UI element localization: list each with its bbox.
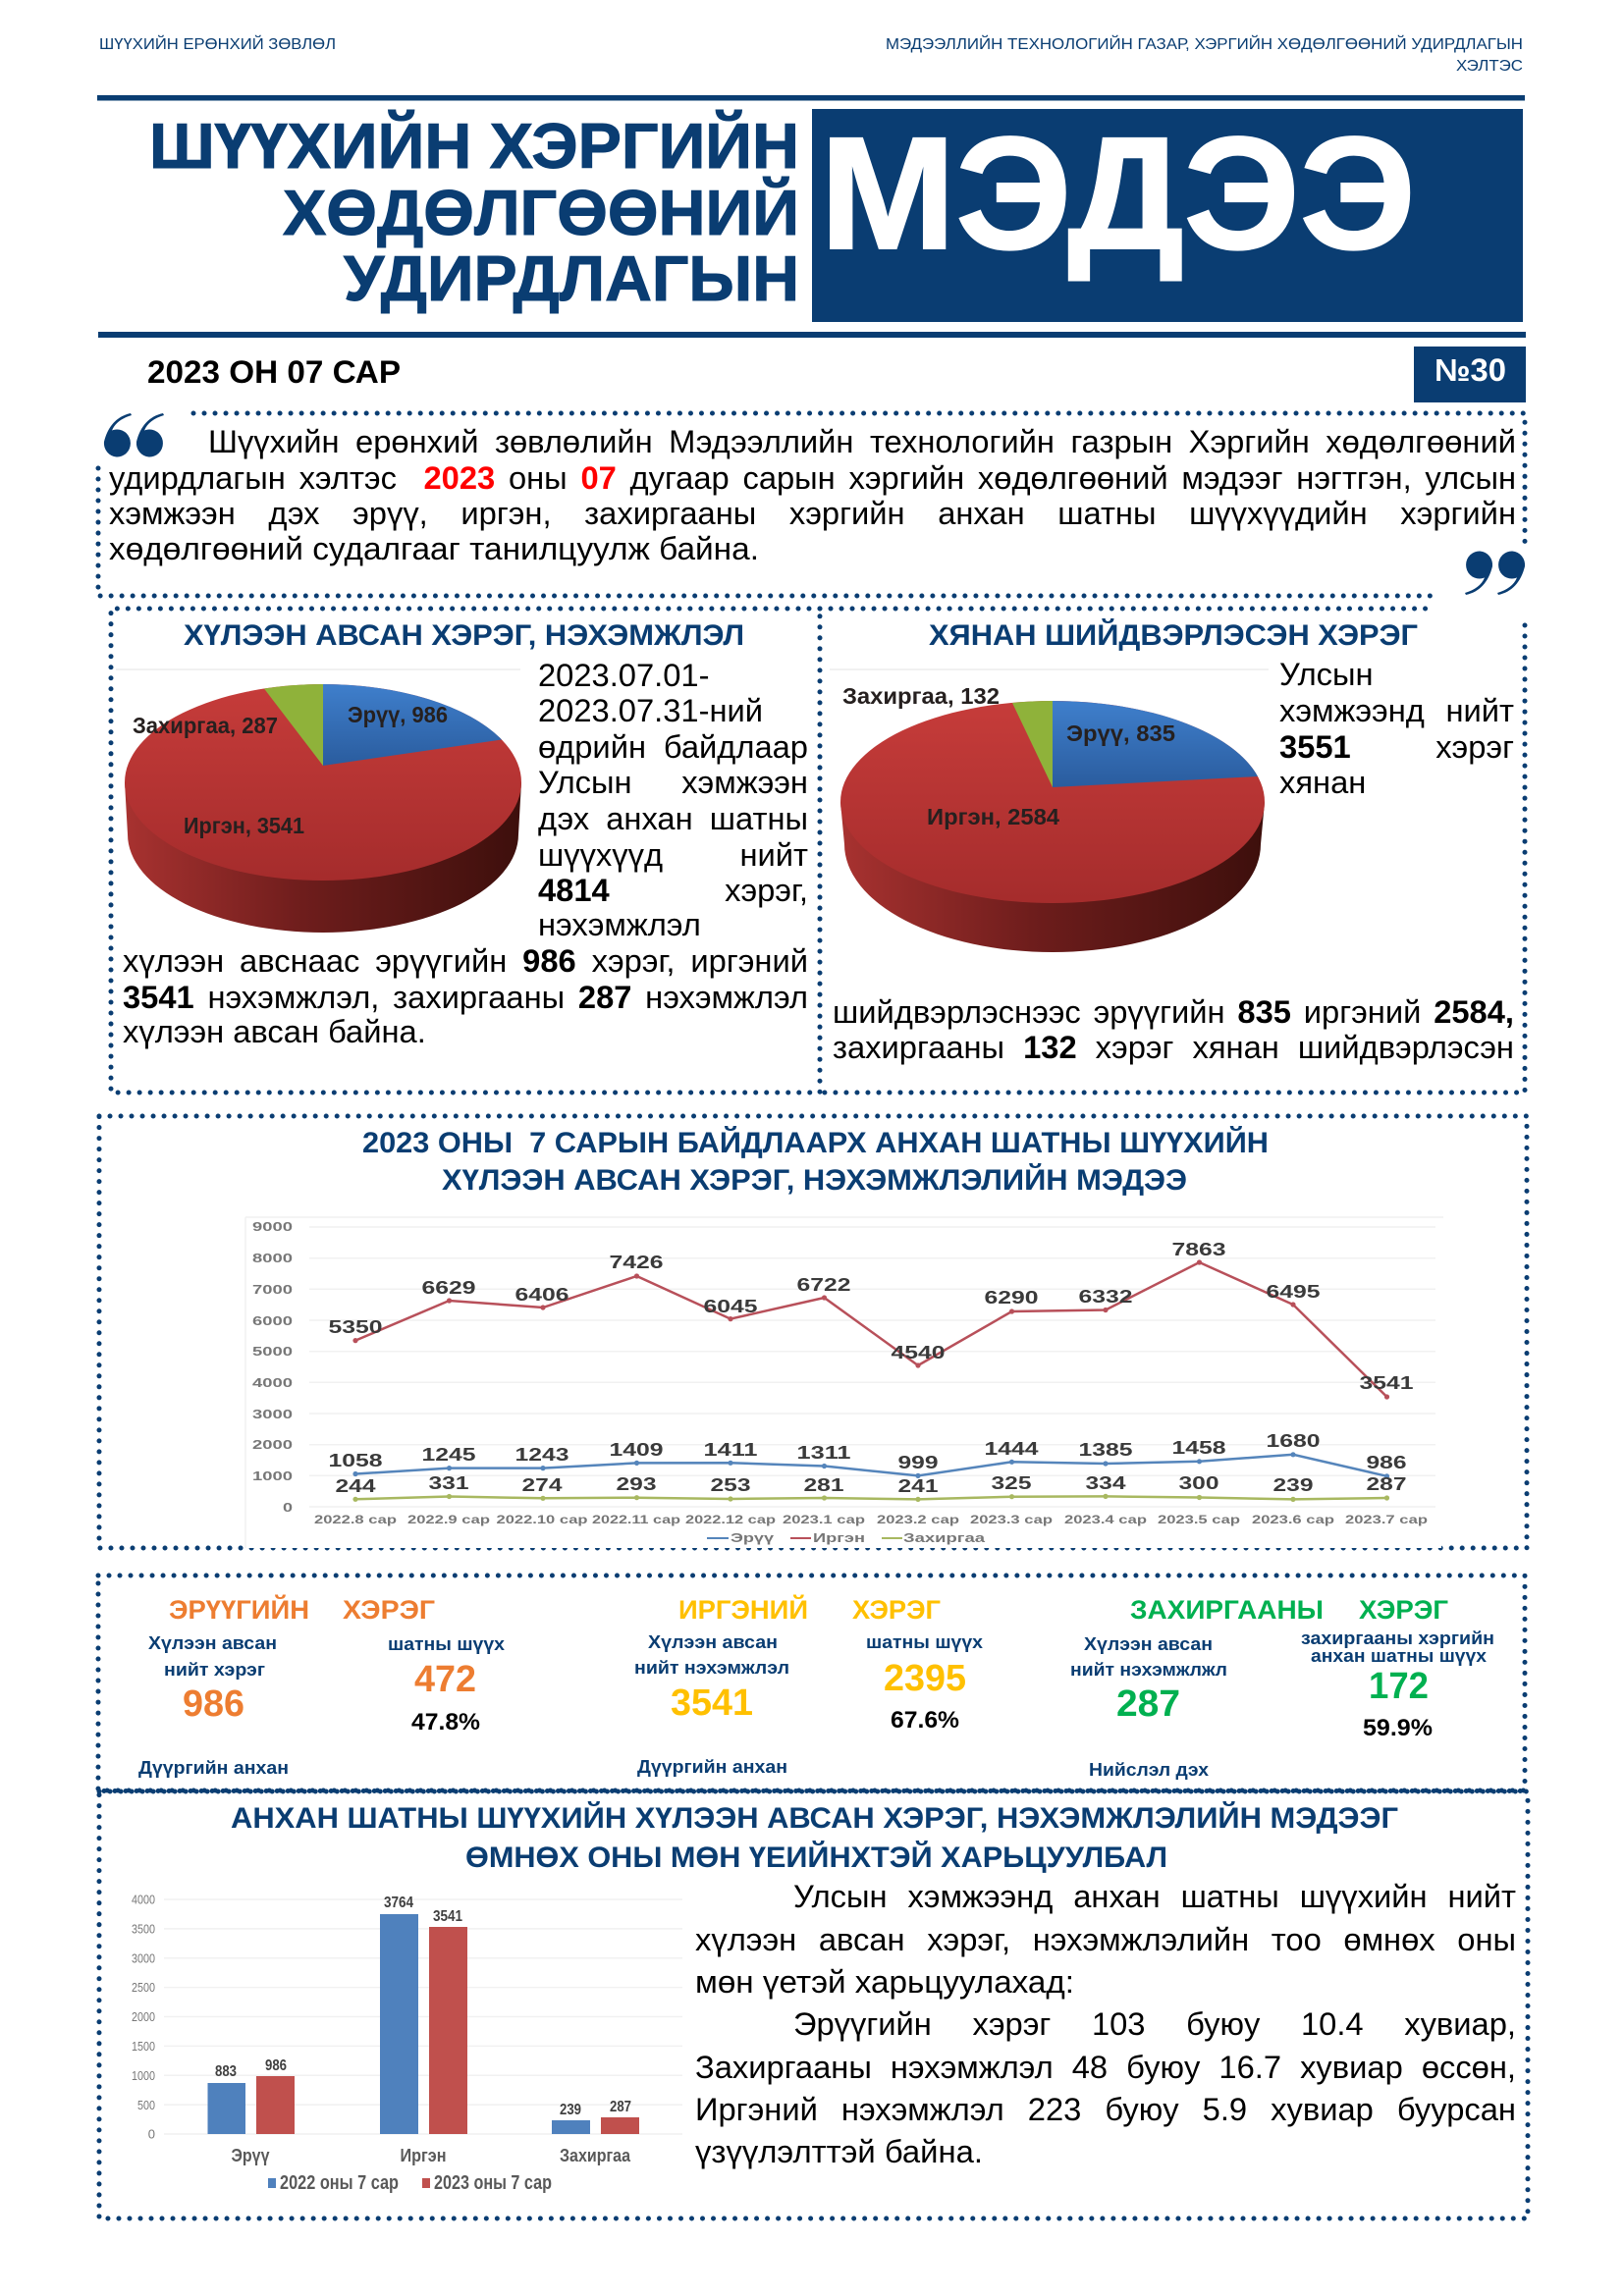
title box: МЭДЭЭ: МЭДЭЭ	[820, 103, 1416, 283]
series: Эрүү: 1458	[1172, 1438, 1225, 1458]
x axis labels: 2022.8 сар	[314, 1513, 397, 1526]
title box: МЭДЭЭ	[812, 103, 1523, 322]
series: Иргэн	[328, 1240, 1414, 1397]
panel: monthly trend	[99, 1116, 1527, 1548]
y axis labels: 7000	[252, 1282, 293, 1297]
x axis labels: 2022.12 сар	[685, 1513, 776, 1526]
bar values: 986	[265, 2057, 287, 2074]
series: Эрүү: 1245	[422, 1445, 475, 1465]
legend	[707, 1530, 986, 1545]
series: Захиргаа: 244	[336, 1476, 375, 1496]
stat group: civil	[634, 1594, 983, 1777]
series: Захиргаа: 239	[1272, 1475, 1314, 1495]
y axis labels: 8000	[252, 1251, 293, 1265]
pie chart: decided: Захиргаа, 132	[842, 683, 1000, 709]
text block: comparison: Эрүүгийн хэрэг 103 буюу 10.4 хувиар,	[793, 2006, 1516, 2042]
bar chart axis labels: 2500	[132, 1980, 155, 1995]
issue number badge	[1414, 347, 1526, 402]
series: Эрүү: 1311	[797, 1443, 850, 1463]
panel: decided cases	[820, 609, 1525, 1093]
stat group: criminal: Дүүргийн анхан	[138, 1758, 289, 1778]
y axis labels: 9000	[252, 1219, 293, 1234]
panel: introduction	[98, 413, 1525, 596]
categories	[232, 2146, 631, 2165]
y axis labels: 5000	[252, 1344, 293, 1359]
text block: received: өдрийн байдлаар	[538, 729, 808, 765]
x axis labels: 2022.11 сар	[592, 1513, 680, 1526]
stat group: criminal: Хүлээн авсан	[148, 1633, 277, 1653]
series: Эрүү: 986	[1367, 1453, 1406, 1472]
series: Эрүү: 999	[897, 1453, 939, 1472]
series: Иргэн: 7426	[609, 1253, 664, 1272]
panel: key statistics	[98, 1575, 1525, 1790]
bar chart axis labels: 1500	[132, 2039, 155, 2054]
stat group: administrative: захиргааны хэргийн	[1301, 1629, 1494, 1648]
text block: comparison: үзүүлэлттэй байна.	[695, 2133, 983, 2169]
department name line 2: ХЭЛТЭС	[1456, 58, 1523, 75]
bar values: 287	[610, 2099, 631, 2115]
stat group: criminal: 47.8%	[411, 1709, 480, 1735]
series: Захиргаа: 253	[711, 1475, 750, 1495]
pie chart: received: Эрүү, 986	[348, 702, 448, 727]
series: Эрүү: 1243	[514, 1445, 569, 1465]
y axis labels: 6000	[252, 1313, 293, 1328]
y axis labels: 0	[283, 1500, 293, 1515]
series: Захиргаа: 274	[522, 1475, 562, 1495]
series: Эрүү: 1409	[609, 1440, 664, 1460]
text block: received: шүүхүүд нийт	[538, 837, 808, 873]
series: Иргэн: 7863	[1172, 1240, 1225, 1259]
series: Захиргаа: 293	[617, 1474, 656, 1494]
bar values: 883	[215, 2063, 237, 2080]
text block: comparison: хүлээн авсан хэрэг, нэхэмжлэлийн тоо өмнөх оны	[695, 1922, 1516, 1957]
stat group: administrative: ХЭРЭГ	[1359, 1595, 1448, 1625]
y axis labels: 4000	[252, 1375, 293, 1390]
series: Захиргаа	[336, 1473, 1406, 1499]
y axis labels: 2000	[252, 1437, 293, 1452]
x axis labels: 2023.1 сар	[783, 1513, 865, 1526]
series: Иргэн: 6045	[703, 1297, 758, 1316]
line chart	[245, 1215, 1443, 1548]
y axis labels: 1000	[252, 1468, 293, 1483]
x axis labels: 2023.6 сар	[1252, 1513, 1334, 1526]
title: three lines: УДИРДЛАГЫН	[344, 242, 799, 314]
text block: comparison: Иргэний нэхэмжлэл 223 буюу 5.9 хувиар буурсан	[695, 2092, 1516, 2127]
categories: Эрүү	[232, 2146, 269, 2165]
pie chart: received: Захиргаа, 287	[133, 713, 278, 738]
chart title: 2023 ОНЫ 7 САРЫН БАЙДЛААРХ АНХАН ШАТНЫ ШҮҮХИЙН	[362, 1126, 1269, 1159]
stat group: criminal: нийт хэрэг	[164, 1660, 266, 1680]
bar values	[215, 1895, 631, 2118]
heading: ХҮЛЭЭН АВСАН ХЭРЭГ, НЭХЭМЖЛЭЛ	[184, 619, 744, 652]
heading: ХЯНАН ШИЙДВЭРЛЭСЭН ХЭРЭГ	[929, 618, 1418, 652]
stat group: criminal: ЭРҮҮГИЙН	[169, 1594, 309, 1625]
stat group: civil: 3541	[671, 1682, 753, 1724]
text block: received: 2023.07.01-	[538, 657, 709, 693]
x axis labels: 2023.7 сар	[1345, 1513, 1428, 1526]
text block: decided: хэмжээнд нийт	[1279, 693, 1514, 728]
bar chart axis labels: 1000	[132, 2068, 155, 2083]
series: Иргэн: 4540	[892, 1343, 945, 1362]
bar chart legend	[268, 2172, 552, 2194]
heading: АНХАН ШАТНЫ ШҮҮХИЙН ХҮЛЭЭН АВСАН ХЭРЭГ, НЭХЭМЖЛЭЛИЙН МЭДЭЭГ	[231, 1801, 1398, 1835]
title: three lines	[149, 110, 799, 314]
issue number badge: №30	[1435, 352, 1506, 388]
series: Захиргаа: 287	[1367, 1474, 1406, 1494]
bar values: 239	[560, 2102, 581, 2118]
stat group: criminal	[138, 1594, 505, 1778]
text block: decided: 3551 хэрэг	[1279, 729, 1514, 765]
categories: Иргэн	[401, 2146, 446, 2165]
title: three lines: ШҮҮХИЙН ХЭРГИЙН	[149, 110, 799, 182]
stat group: civil: Хүлээн авсан	[648, 1632, 778, 1652]
series: Эрүү: 1680	[1267, 1431, 1320, 1451]
bar chart legend: 2023 оны 7 сар	[434, 2172, 552, 2194]
pie chart: received	[116, 669, 521, 933]
intro text: Шүүхийн ерөнхий зөвлөлийн Мэдээллийн технологийн газрын Хэргийн хөдөлгөөний	[208, 424, 1516, 459]
chart title	[362, 1126, 1269, 1197]
panel: received cases	[111, 609, 820, 1093]
bar chart	[132, 1893, 682, 2194]
bar chart axis labels	[132, 1893, 155, 2142]
bar chart axis labels: 4000	[132, 1893, 155, 1906]
x axis labels: 2022.10 сар	[497, 1513, 587, 1526]
stat group: civil: ХЭРЭГ	[852, 1595, 941, 1625]
stat group: civil: 2395	[884, 1658, 966, 1699]
masthead	[97, 95, 1526, 338]
x axis labels: 2023.4 сар	[1064, 1513, 1147, 1526]
header: top small text	[99, 34, 1523, 75]
icon: opening quote	[104, 413, 164, 456]
stat group: civil: нийт нэхэмжлэл	[634, 1658, 789, 1678]
series: Эрүү: 1385	[1078, 1440, 1133, 1460]
text block: received: 4814 хэрэг,	[538, 873, 808, 908]
categories: Захиргаа	[560, 2146, 631, 2165]
stat group: civil: шатны шүүх	[866, 1632, 983, 1652]
legend: Захиргаа	[903, 1530, 986, 1545]
series: Иргэн: 6332	[1078, 1287, 1133, 1307]
pie chart: decided	[830, 669, 1269, 952]
bar values: 3764	[384, 1895, 413, 1911]
x axis labels: 2023.2 сар	[877, 1513, 959, 1526]
series: Иргэн: 6290	[984, 1288, 1039, 1308]
icon: closing quote	[1465, 552, 1525, 595]
bars	[208, 1914, 639, 2134]
text block: comparison	[695, 1879, 1516, 2169]
title: three lines: ХӨДӨЛГӨӨНИЙ	[283, 177, 799, 248]
text block: comparison: Улсын хэмжээнд анхан шатны шүүхийн нийт	[793, 1879, 1516, 1914]
organisation name: ШҮҮХИЙН ЕРӨНХИЙ ЗӨВЛӨЛ	[99, 34, 336, 53]
stat group: administrative: ЗАХИРГААНЫ	[1130, 1595, 1324, 1625]
text block: comparison: мөн үетэй харьцуулахад:	[695, 1963, 1074, 2000]
stat group: administrative: Хүлээн авсан	[1084, 1634, 1213, 1654]
legend: Иргэн	[813, 1530, 865, 1545]
series: Захиргаа: 241	[897, 1476, 939, 1496]
text block: received: хүлээн авснаас эрүүгийн 986 хэрэг, иргэний	[123, 943, 808, 979]
intro text: удирдлагын хэлтэс 2023 оны 07 дугаар сарын хэргийн хөдөлгөөний мэдээг нэгтгэн, улсын	[109, 460, 1516, 496]
y axis labels: 3000	[252, 1407, 293, 1421]
series: Захиргаа: 331	[428, 1473, 469, 1493]
text block: received: хүлээн авсан байна.	[123, 1013, 426, 1049]
intro text: хөдөлгөөний судалгааг танилцуулж байна.	[109, 530, 759, 566]
bar chart axis labels: 0	[148, 2126, 155, 2142]
intro text: хэмжээн дэх эрүү, иргэн, захиргааны хэргийн анхан шатны шүүхүүдийн хэргийн	[109, 496, 1516, 531]
legend: Эрүү	[731, 1530, 775, 1545]
x axis labels: 2023.3 сар	[970, 1513, 1053, 1526]
series: Эрүү: 1444	[984, 1439, 1039, 1459]
series: Иргэн: 6722	[797, 1275, 850, 1295]
x axis labels: 2023.5 сар	[1158, 1513, 1240, 1526]
stat group: administrative: Нийслэл дэх	[1089, 1760, 1209, 1780]
text block: received: нэхэмжлэл	[538, 906, 701, 942]
text block: received: 3541 нэхэмжлэл, захиргааны 287 нэхэмжлэл	[123, 980, 808, 1015]
bar chart axis labels: 3000	[132, 1950, 155, 1965]
text block: decided	[833, 656, 1514, 1066]
stat group: criminal: 986	[183, 1683, 244, 1725]
bar chart axis labels: 2000	[132, 2009, 155, 2024]
text block: decided: шийдвэрлэснээс эрүүгийн 835 иргэний 2584,	[833, 994, 1514, 1030]
panel: year-over-year comparison	[99, 1791, 1528, 2218]
text block: decided: Улсын	[1279, 656, 1374, 692]
series: Захиргаа: 334	[1086, 1473, 1125, 1493]
stat group: criminal: ХЭРЭГ	[343, 1595, 435, 1625]
pie chart: decided: Эрүү, 835	[1066, 721, 1175, 746]
series: Иргэн: 6406	[514, 1285, 569, 1305]
stat group: administrative: 59.9%	[1363, 1715, 1433, 1741]
series: Захиргаа: 300	[1178, 1473, 1219, 1493]
series: Эрүү: 1058	[328, 1451, 383, 1470]
intro text	[109, 424, 1516, 566]
heading	[231, 1801, 1398, 1874]
bar values: 3541	[433, 1908, 462, 1925]
stat group: administrative: нийт нэхэмжлжл	[1070, 1660, 1227, 1680]
pie chart: decided: Иргэн, 2584	[927, 804, 1059, 829]
x axis labels	[314, 1513, 1428, 1526]
stat group: administrative: анхан шатны шүүх	[1311, 1646, 1487, 1666]
text block: decided: хянан	[1279, 764, 1366, 800]
stat group: administrative	[1070, 1595, 1494, 1780]
text block: received: 2023.07.31-ний	[538, 692, 763, 728]
heading: ӨМНӨХ ОНЫ МӨН ҮЕИЙНХТЭЙ ХАРЬЦУУЛБАЛ	[465, 1841, 1167, 1874]
pie chart: received: Иргэн, 3541	[184, 813, 304, 838]
stat group: administrative: 287	[1116, 1683, 1180, 1725]
series: Эрүү: 1411	[703, 1440, 758, 1460]
stat group: civil: Дүүргийн анхан	[637, 1757, 787, 1777]
stat group: administrative: 172	[1369, 1666, 1429, 1707]
text block: received: дэх анхан шатны	[538, 801, 808, 836]
stat group: criminal: 472	[414, 1659, 476, 1700]
text block: decided: захиргааны 132 хэрэг хянан шийдвэрлэсэн	[833, 1030, 1514, 1065]
date: 2023 ОН 07 САР	[147, 354, 401, 390]
series: Иргэн: 6629	[422, 1278, 475, 1298]
x axis labels: 2022.9 сар	[407, 1513, 490, 1526]
bar chart axis labels: 500	[137, 2098, 155, 2112]
stat group: civil: ИРГЭНИЙ	[678, 1594, 808, 1625]
series: Иргэн: 3541	[1359, 1373, 1414, 1393]
department name: МЭДЭЭЛЛИЙН ТЕХНОЛОГИЙН ГАЗАР, ХЭРГИЙН ХӨДӨЛГӨӨНИЙ УДИРДЛАГЫН	[886, 34, 1523, 53]
bar chart legend: 2022 оны 7 сар	[280, 2172, 399, 2194]
bar chart axis labels: 3500	[132, 1921, 155, 1936]
stat group: civil: 67.6%	[891, 1707, 959, 1734]
text block: comparison: Захиргааны нэхэмжлэл 48 буюу 16.7 хувиар өссөн,	[695, 2050, 1516, 2085]
chart title: ХҮЛЭЭН АВСАН ХЭРЭГ, НЭХЭМЖЛЭЛИЙН МЭДЭЭ	[442, 1163, 1187, 1197]
series: Захиргаа: 281	[803, 1475, 844, 1495]
text block: received	[123, 657, 808, 1049]
stat group: criminal: шатны шүүх	[388, 1634, 505, 1654]
series: Захиргаа: 325	[992, 1473, 1031, 1493]
y axis labels	[252, 1219, 293, 1515]
series: Иргэн: 6495	[1267, 1282, 1320, 1302]
series: Иргэн: 5350	[328, 1317, 383, 1337]
text block: received: Улсын хэмжээн	[538, 765, 808, 800]
series: Эрүү	[328, 1431, 1406, 1476]
